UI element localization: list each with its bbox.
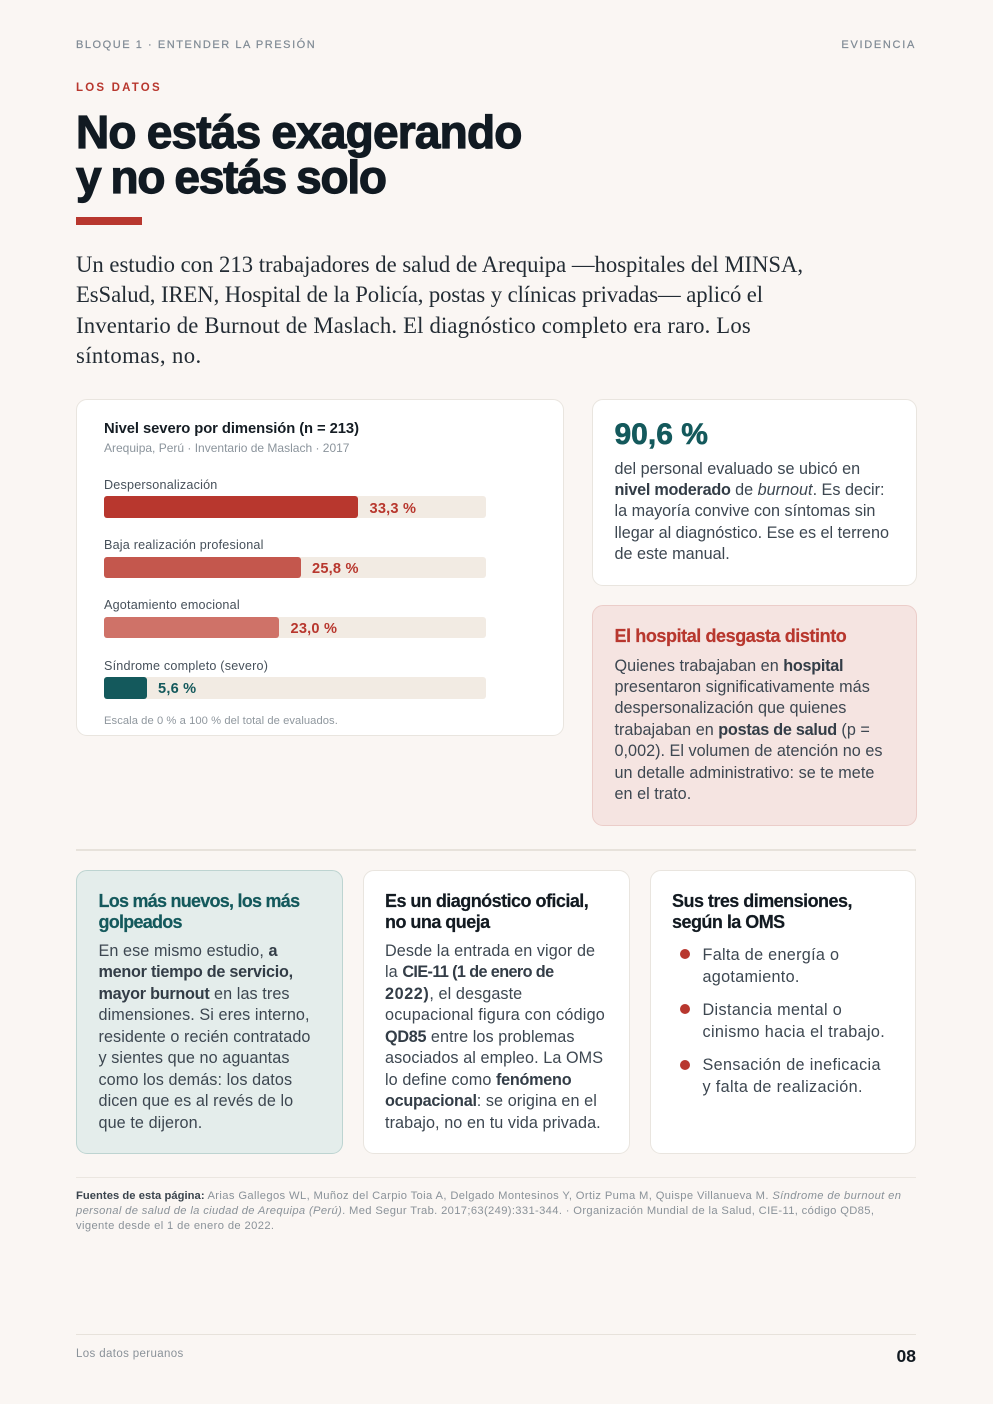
bullet text 2: cinismo hacia el trabajo. (702, 1023, 885, 1041)
chart subtitle: Arequipa, Perú · Inventario de Maslach · 2017 (104, 441, 349, 455)
panel: los más nuevos (76, 870, 343, 1154)
heading: los más nuevos: golpeados (98, 912, 182, 932)
intro paragraph: Inventario de Burnout de Maslach. El diagnóstico completo era raro. Los (76, 313, 751, 338)
callout text: trabajaban en postas de salud (p = (614, 721, 870, 739)
stat text: la mayoría convive con síntomas sin (614, 502, 875, 520)
title rule (76, 217, 142, 225)
text: diagnóstico oficial (385, 942, 605, 1132)
heading: tres dimensiones: Sus tres dimensiones, (672, 891, 852, 911)
heading: diagnóstico oficial (385, 891, 588, 932)
text: diagnóstico oficial: ocupacional: se origina en el (385, 1092, 597, 1110)
text: los más nuevos (98, 942, 310, 1132)
bullet text 3: y falta de realización. (702, 1078, 863, 1096)
divider (76, 849, 916, 851)
bullet icon 1 (680, 949, 690, 959)
callout text: presentaron significativamente más (614, 678, 870, 696)
title: y no estás solo (76, 151, 386, 203)
callout heading: El hospital desgasta distinto (614, 626, 846, 646)
text: los más nuevos: menor tiempo de servicio, (98, 963, 293, 981)
header: section label: EVIDENCIA (841, 39, 916, 51)
sources: Fuentes de esta página: Arias Gallegos WL, Muñoz del Carpio Toia A, Delgado Montesinos Y, Ortiz Puma M, Quispe Villanueva M. Síndrome de burnout en (76, 1190, 901, 1202)
bar value 33,3 %: 33,3 % (370, 501, 416, 517)
bar 25,8 % (104, 556, 300, 578)
heading: los más nuevos (98, 891, 300, 932)
heading: tres dimensiones: según la OMS (672, 912, 785, 932)
text: los más nuevos: como los demás: los datos (98, 1071, 292, 1089)
panel: bar chart (76, 399, 564, 736)
heading: tres dimensiones (672, 891, 852, 932)
text: los más nuevos: dimensiones. Si eres interno, (98, 1006, 310, 1024)
callout text: un detalle administrativo: se te mete (614, 764, 874, 782)
bar track 3 (104, 616, 486, 638)
heading: los más nuevos: Los más nuevos, los más (98, 891, 299, 911)
bar track 1 (104, 496, 486, 518)
stat text: del personal evaluado se ubicó en (614, 460, 860, 478)
bullet text 3: Sensación de ineficacia (702, 1056, 881, 1074)
heading: diagnóstico oficial: Es un diagnóstico oficial, (385, 891, 588, 911)
text: los más nuevos: En ese mismo estudio, a (98, 942, 277, 960)
chart scale note: Escala de 0 % a 100 % del total de evaluados. (104, 715, 338, 727)
panel: hospital callout (592, 605, 916, 826)
panel: stat card (592, 399, 916, 586)
chart title: Nivel severo por dimensión (n = 213) (104, 421, 359, 437)
text: los más nuevos: dicen que es al revés de lo (98, 1092, 293, 1110)
bullet text 2: Distancia mental o (702, 1001, 842, 1019)
intro paragraph: EsSalud, IREN, Hospital de la Policía, postas y clínicas privadas— aplicó el (76, 282, 763, 307)
stat text: nivel moderado de burnout. Es decir: (614, 481, 885, 499)
text: los más nuevos: que te dijeron. (98, 1114, 202, 1132)
text: los más nuevos: y sientes que no aguantas (98, 1049, 290, 1067)
bullet text 1: Falta de energía o (702, 946, 839, 964)
text: diagnóstico oficial: 2022), el desgaste (385, 985, 522, 1003)
heading: diagnóstico oficial: no una queja (385, 912, 490, 932)
text: diagnóstico oficial: asociados al empleo. La OMS (385, 1049, 603, 1067)
intro paragraph (76, 252, 803, 368)
intro paragraph: Un estudio con 213 trabajadores de salud de Arequipa —hospitales del MINSA, (76, 252, 803, 277)
text: los más nuevos: residente o recién contratado (98, 1028, 310, 1046)
eyebrow: LOS DATOS (76, 82, 162, 94)
title: No estás exagerando (76, 106, 522, 158)
footer label: Los datos peruanos (76, 1348, 184, 1360)
bullet icon 2 (680, 1004, 690, 1014)
text: diagnóstico oficial: la CIE-11 (1 de enero de (385, 963, 553, 981)
text: diagnóstico oficial: trabajo, no en tu vida privada. (385, 1114, 601, 1132)
header: block label: BLOQUE 1 · ENTENDER LA PRESIÓN (76, 39, 316, 51)
divider (76, 1177, 916, 1178)
bar 33,3 % (104, 496, 358, 518)
bar label: Despersonalización: Despersonalización (104, 478, 218, 492)
bar label: Baja realización profesional: Baja realización profesional (104, 538, 264, 552)
bar label: Agotamiento emocional: Agotamiento emocional (104, 598, 240, 612)
text: diagnóstico oficial: Desde la entrada en vigor de (385, 942, 595, 960)
bar label: Síndrome completo: Síndrome completo (severo) (104, 659, 268, 673)
bar track 2 (104, 556, 486, 578)
callout text: despersonalización que quienes (614, 699, 846, 717)
bullet text 2 (702, 1001, 885, 1041)
text: los más nuevos: mayor burnout en las tres (98, 985, 290, 1003)
panel: diagnóstico oficial (363, 870, 630, 1154)
bar track 4 (104, 677, 486, 698)
stat text: llegar al diagnóstico. Ese es el terreno (614, 524, 889, 542)
bullet text 1: agotamiento. (702, 968, 800, 986)
bullet text 1 (702, 946, 839, 986)
bullet icon 3 (680, 1060, 690, 1070)
bar value 5,6 %: 5,6 % (158, 681, 196, 697)
title (76, 106, 522, 204)
callout text (614, 656, 882, 803)
stat text (614, 460, 889, 563)
bar value 23,0 %: 23,0 % (290, 621, 337, 637)
text: diagnóstico oficial: ocupacional figura con código (385, 1006, 605, 1024)
callout text: en el trato. (614, 785, 691, 803)
text: diagnóstico oficial: QD85 entre los problemas (385, 1028, 575, 1046)
callout text: 0,002). El volumen de atención no es (614, 742, 882, 760)
bar 23,0 % (104, 616, 279, 638)
sources: vigente desde el 1 de enero de 2022. (76, 1220, 274, 1232)
page number: 08 (897, 1346, 916, 1366)
panel: tres dimensiones (650, 870, 916, 1154)
intro paragraph: síntomas, no. (76, 343, 202, 368)
bar value 25,8 %: 25,8 % (312, 561, 359, 577)
sources (76, 1190, 901, 1232)
text: diagnóstico oficial: lo define como fenómeno (385, 1071, 571, 1089)
divider (76, 1334, 916, 1335)
stat text: de este manual. (614, 545, 730, 563)
sources: personal de salud de la ciudad de Arequipa (Perú). Med Segur Trab. 2017;63(249):331-344. · Organización Mundial de la Salud, CIE-11, código QD85, (76, 1205, 874, 1217)
bar 5,6 % (104, 677, 147, 698)
stat number: 90,6 % (614, 418, 708, 451)
callout text: Quienes trabajaban en hospital (614, 656, 843, 674)
bullet text 3 (702, 1056, 881, 1096)
